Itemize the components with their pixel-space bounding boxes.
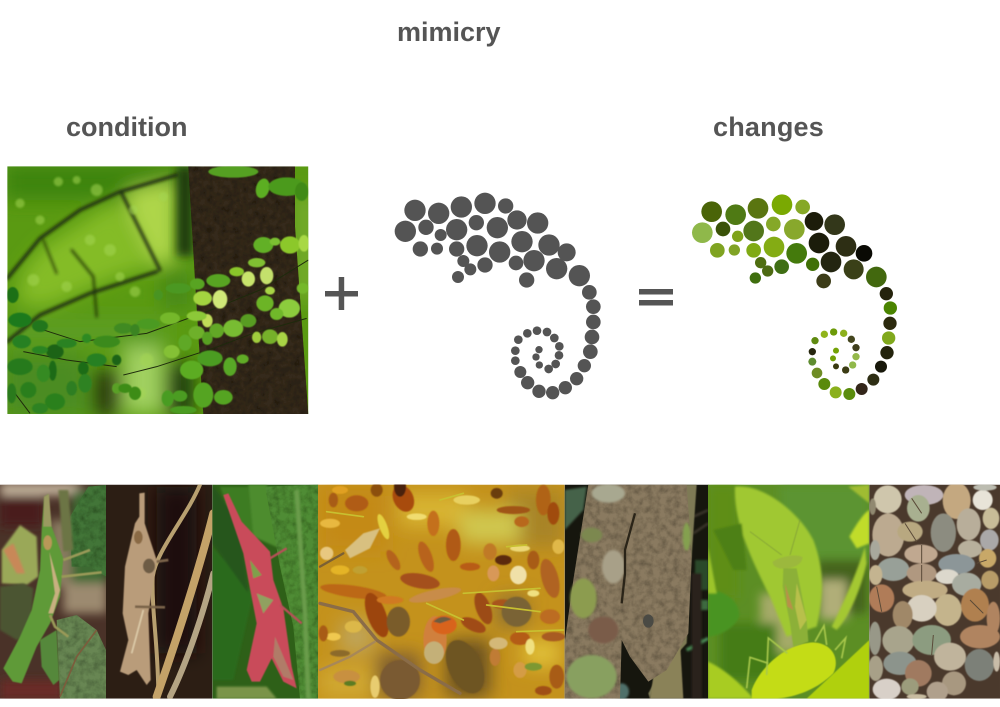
photo: lithops among pebbles	[868, 482, 1000, 702]
leaves: foreground	[7, 166, 309, 414]
photo: sunlit forest leaves and tree trunk	[3, 163, 313, 417]
chameleon made of green and dark dots	[692, 194, 897, 400]
robin	[423, 616, 457, 664]
grasshopper: tan	[120, 493, 168, 685]
photo: brown grasshopper on straw	[106, 485, 213, 699]
photo: robin among autumn leaves	[318, 477, 565, 700]
plus sign	[325, 277, 358, 310]
grasshopper: pink	[223, 493, 302, 688]
grasshopper: green	[3, 494, 102, 683]
heading: changes: changes	[713, 112, 824, 142]
title: mimicry: mimicry	[397, 17, 501, 47]
photo: pink grasshopper on green leaf	[212, 485, 318, 699]
photo: green praying mantis on leaves	[708, 485, 869, 699]
photo: green grasshopper on leaves	[0, 483, 107, 700]
heading: condition: condition	[66, 112, 187, 142]
mantis	[747, 520, 846, 688]
photo: leaf-tailed gecko on branch	[565, 484, 709, 700]
chameleon made of grey dots	[395, 193, 601, 399]
equals sign	[639, 289, 673, 306]
pebbles and lithops	[868, 482, 1000, 702]
